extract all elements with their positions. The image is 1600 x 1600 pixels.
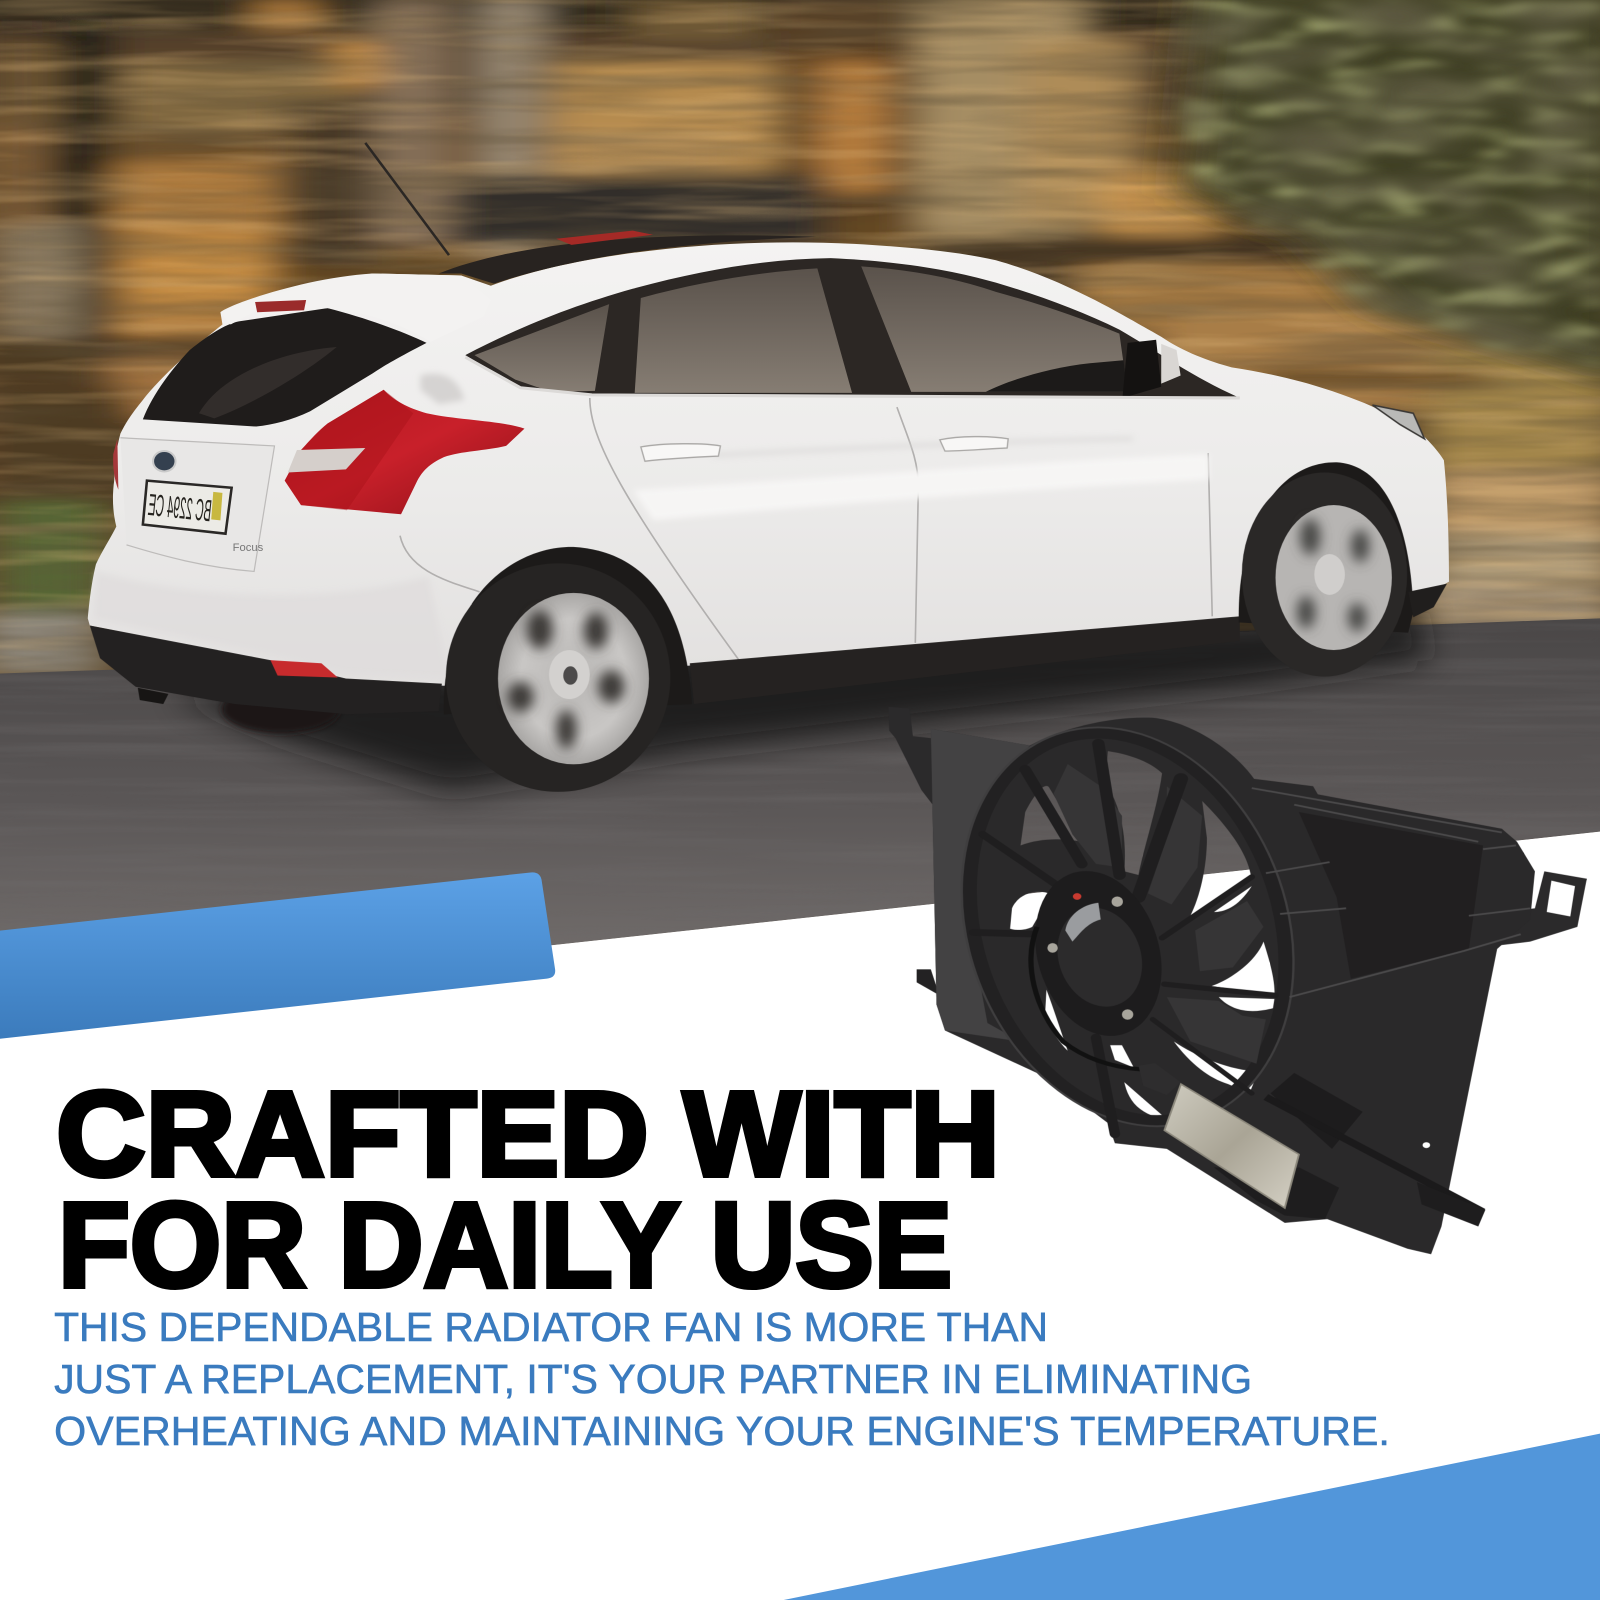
spoiler [220,273,491,342]
top-left mounting clip [888,707,936,808]
side sill [690,616,1240,704]
antenna [365,143,449,255]
front wheel arch [1239,462,1413,633]
left shroud panel shade [931,729,1030,1042]
shroud ribs [1252,788,1530,997]
front wheel [1242,472,1407,677]
window frame [465,258,1240,398]
description paragraph [54,1304,1390,1454]
model badge: Focus [233,542,264,554]
side red marker [113,439,118,490]
window reflection [986,360,1128,392]
wiring cable [1031,927,1141,1069]
description paragraph: JUST A REPLACEMENT, IT'S YOUR PARTNER IN ELIMINATING [54,1356,1252,1402]
blue accent bar [0,872,555,1039]
connector block [1214,1167,1339,1219]
headlight [1372,405,1424,439]
car shadow on road [173,612,1429,791]
black roof strip [439,235,816,284]
radiator fan assembly [888,705,1587,1254]
control module box [1271,1073,1363,1149]
car: white hatchback [88,143,1449,792]
headline: CRAFTED WITH [56,1067,1000,1202]
chrome strip [465,357,1240,398]
C-pillar shading [420,374,464,404]
white lower panel [0,832,1600,1600]
license plate [143,481,232,534]
front bumper lower [1408,584,1447,617]
rear quarter window [474,304,609,392]
rear bumper trim [90,626,442,714]
rear wheel [446,563,670,792]
body panel lines [400,398,1212,661]
shroud with blade gaps [931,718,1535,1254]
motor hub [1019,863,1177,1044]
front door handle [940,437,1008,451]
spoiler brake light [255,300,306,312]
car body shell [88,242,1449,686]
headline [56,1067,1000,1313]
rear wheel arch [444,547,692,714]
right mounting clip [1469,871,1587,949]
description paragraph: OVERHEATING AND MAINTAINING YOUR ENGINE'S TEMPERATURE. [54,1408,1390,1454]
blade highlights [1053,764,1266,1064]
mounting hole [1423,1142,1430,1148]
background photo: blurred street scene [0,0,1600,1020]
lower mounting tab [1417,1182,1485,1227]
far side rear wheel [221,685,340,734]
description paragraph: THIS DEPENDABLE RADIATOR FAN IS MORE THAN [54,1304,1048,1350]
exhaust [138,688,168,704]
body shading [94,439,1209,679]
right shroud panel shade [1299,812,1483,979]
fan struts [973,744,1275,1134]
lower rail [1266,1097,1483,1212]
rear door handle [641,444,720,461]
badge [153,451,176,471]
road surface [0,618,1600,946]
left bump [917,969,939,995]
red roof reflection [556,231,653,245]
wiring connector [1138,1063,1181,1095]
front door window [861,266,1128,392]
tailgate panel lines [120,438,274,571]
tail light [285,390,524,514]
car: white hatchback: BC 2294 CE [147,488,213,528]
reverse lamp [288,448,365,472]
side mirror [1122,340,1161,398]
rear door window [635,268,852,393]
rear reflector [270,660,338,678]
headline: FOR DAILY USE [58,1178,952,1313]
blue corner triangle [784,1434,1600,1600]
fan ring [929,711,1326,1142]
metal control module [1164,1084,1299,1208]
rear window [143,308,427,427]
